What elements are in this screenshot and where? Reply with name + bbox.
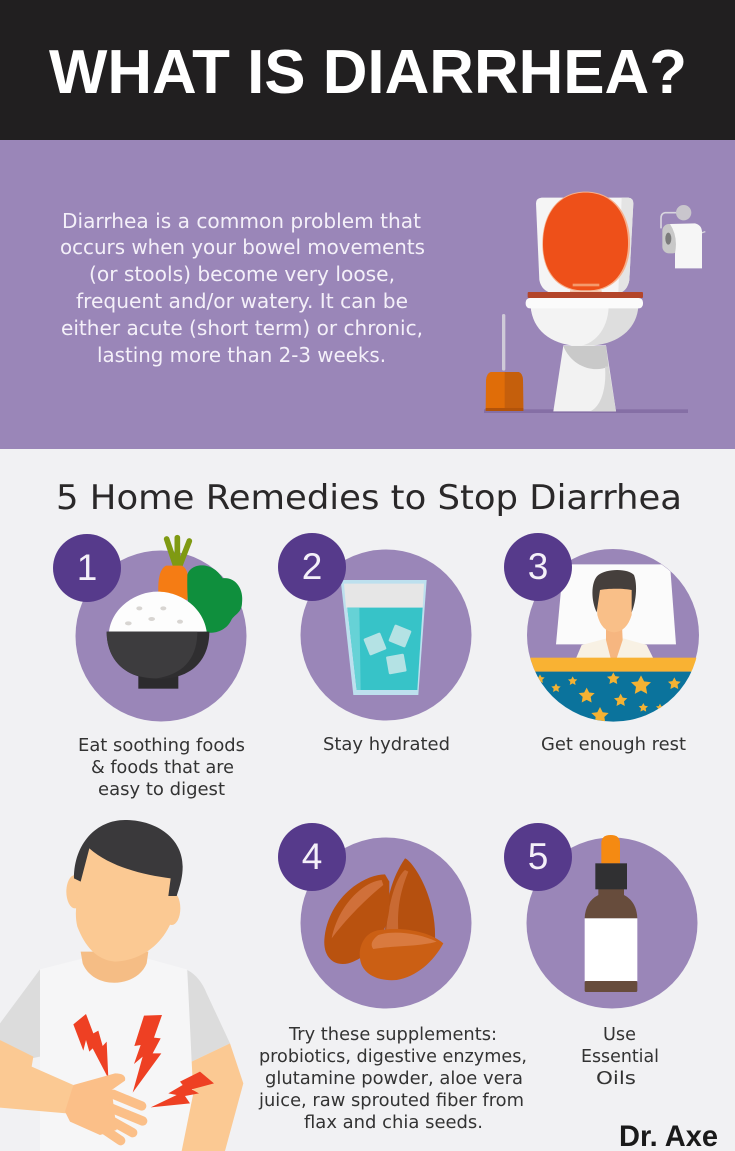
caption 5: Use <box>603 1024 636 1045</box>
header band <box>0 0 735 140</box>
icon: glass of water <box>341 580 427 695</box>
definition text: either acute (short term) or chronic, <box>61 316 423 340</box>
icon: rice bowl, carrot and greens <box>107 538 242 689</box>
caption 1 <box>78 735 245 800</box>
title: WHAT IS DIARRHEA? <box>49 38 687 107</box>
badge 3: 3 <box>528 546 548 587</box>
icon: person in bed <box>527 564 700 725</box>
caption 4 <box>258 1024 527 1133</box>
caption 1: easy to digest <box>98 779 225 800</box>
badge 3 <box>504 533 572 601</box>
definition text: frequent and/or watery. It can be <box>76 289 408 313</box>
hand <box>65 1073 143 1141</box>
caption 4: flax and chia seeds. <box>304 1112 483 1133</box>
badge 2 <box>278 533 346 601</box>
badge 2: 2 <box>302 546 322 587</box>
caption 2: Stay hydrated <box>323 734 450 755</box>
caption 4: juice, raw sprouted fiber from <box>258 1090 524 1111</box>
remedy 5: essential oils <box>504 823 698 1089</box>
icon: toilet, brush and paper <box>484 192 705 413</box>
definition text: lasting more than 2-3 weeks. <box>97 343 386 367</box>
remedy 3: rest <box>504 533 700 755</box>
caption 1: & foods that are <box>91 757 234 778</box>
badge 5 <box>504 823 572 891</box>
caption 4: probiotics, digestive enzymes, <box>259 1046 527 1067</box>
illustration: man with stomach pain <box>0 820 243 1151</box>
heading: 5 home remedies: 5 Home Remedies to Stop Diarrhea <box>56 478 682 518</box>
caption 4: Try these supplements: <box>288 1024 497 1045</box>
caption 5: Essential <box>581 1046 659 1067</box>
remedy 4: supplements <box>258 823 527 1133</box>
badge 4: 4 <box>302 836 322 877</box>
badge 1: 1 <box>77 547 97 588</box>
badge 5: 5 <box>528 836 548 877</box>
remedy 2: hydration <box>278 533 472 755</box>
definition text: (or stools) become very loose, <box>89 262 395 286</box>
remedy 1: soothing foods <box>53 534 246 800</box>
caption 5 <box>581 1024 659 1089</box>
caption 4: glutamine powder, aloe vera <box>265 1068 523 1089</box>
panel: definition <box>0 140 735 449</box>
caption 1: Eat soothing foods <box>78 735 245 756</box>
caption 5: Oils <box>596 1068 636 1089</box>
badge 4 <box>278 823 346 891</box>
definition text <box>60 209 425 367</box>
icon: dropper bottle <box>585 835 637 992</box>
icon: flax seeds <box>324 858 443 980</box>
definition text: Diarrhea is a common problem that <box>62 209 421 233</box>
caption 3: Get enough rest <box>541 734 686 755</box>
definition text: occurs when your bowel movements <box>60 235 425 259</box>
badge 1 <box>53 534 121 602</box>
